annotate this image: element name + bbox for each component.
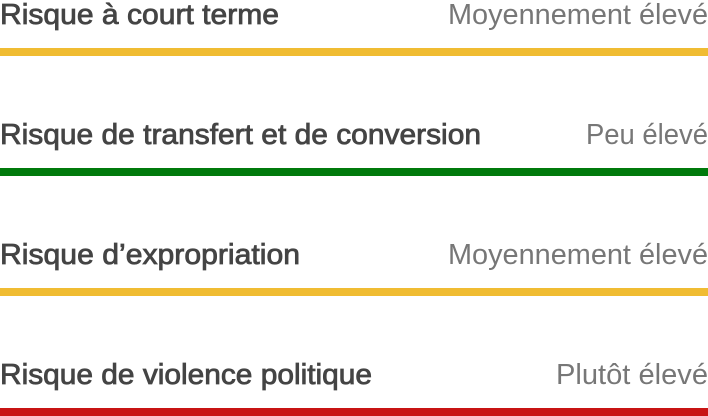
label: expropriation risk: Risque d’expropriation — [0, 239, 300, 271]
bar: green — [0, 168, 708, 176]
label: transfer and conversion risk: Risque de transfert et de conversion — [0, 119, 481, 151]
row: short-term risk — [0, 0, 708, 56]
rating: rather high: Plutôt élevé — [556, 359, 708, 391]
bar: yellow — [0, 48, 708, 56]
rating: moderately high: Moyennement élevé — [448, 239, 708, 271]
row: transfer and conversion risk — [0, 119, 708, 176]
bar: red — [0, 408, 708, 416]
label: political violence risk: Risque de violence politique — [0, 359, 372, 391]
bar: yellow — [0, 288, 708, 296]
row: political violence risk — [0, 359, 708, 416]
row: expropriation risk — [0, 239, 708, 296]
